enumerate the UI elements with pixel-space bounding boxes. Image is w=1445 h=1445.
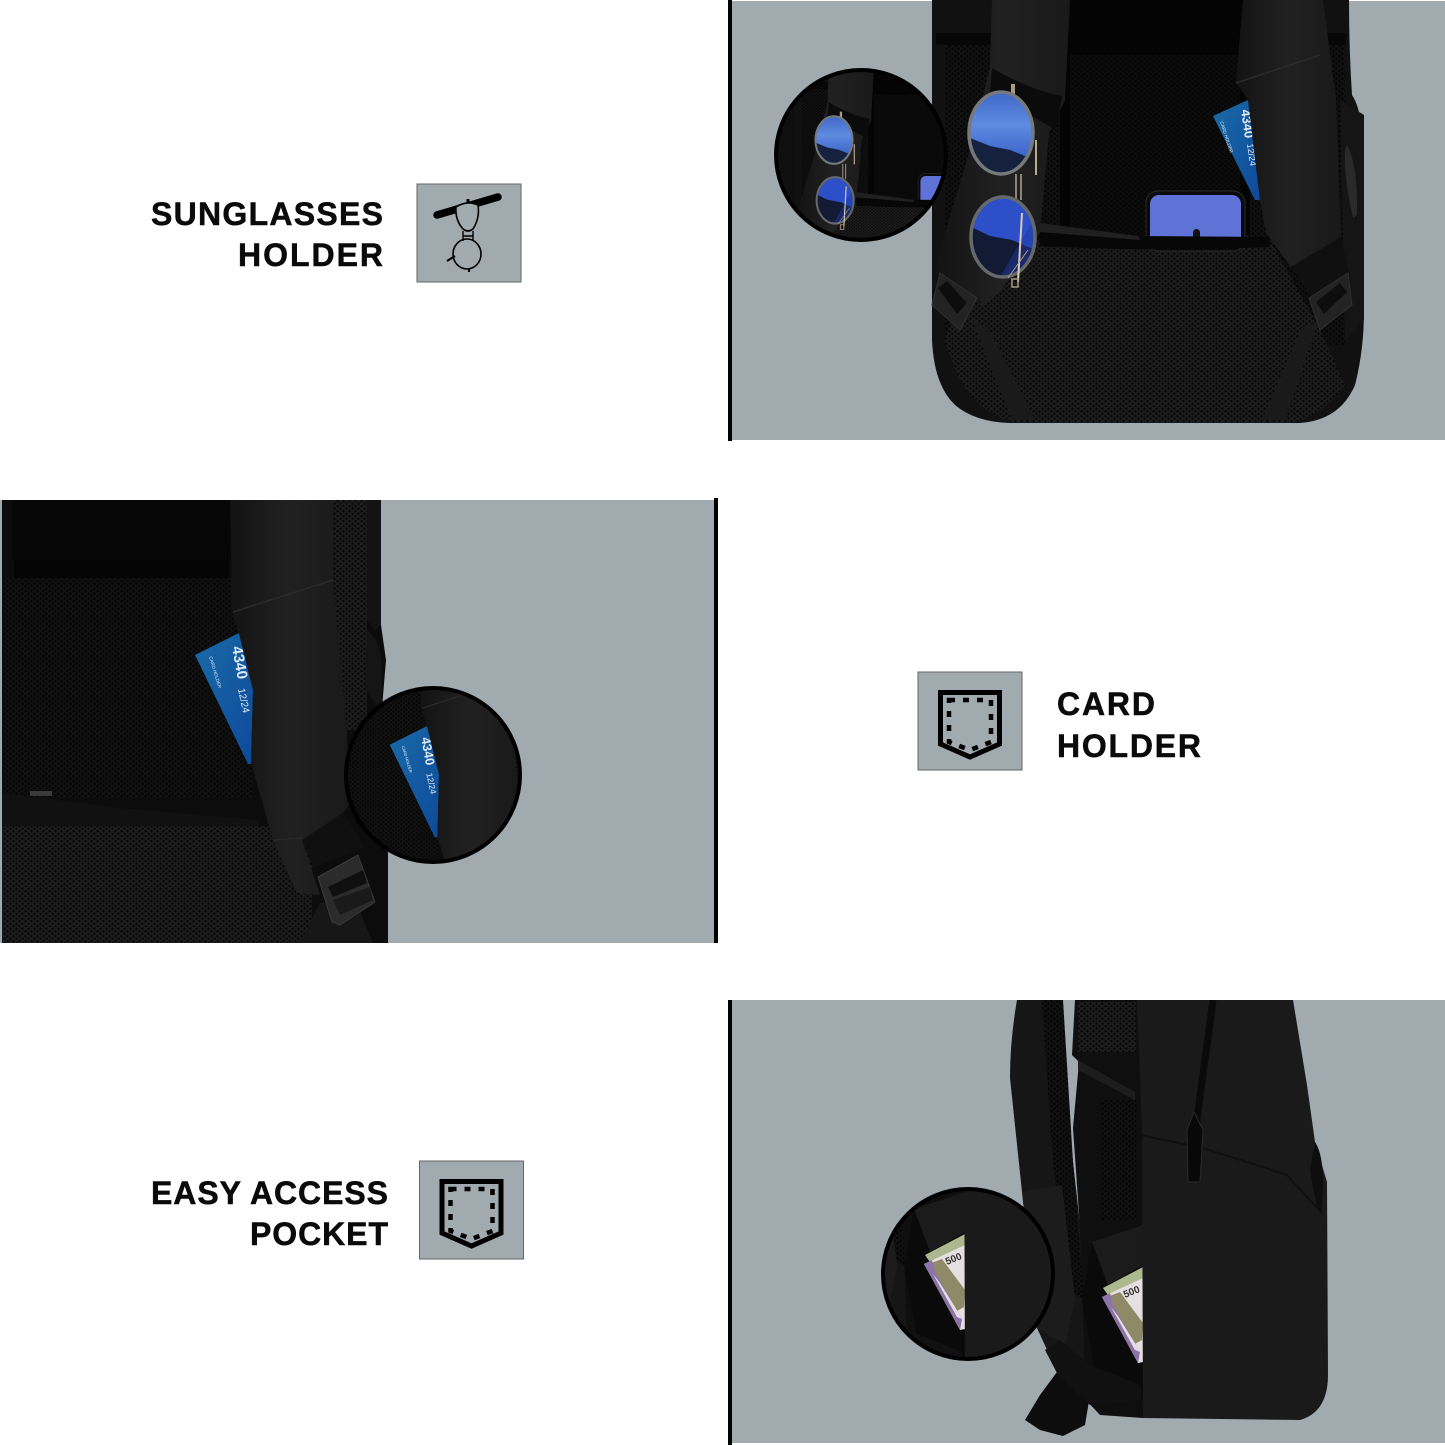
sunglasses holder label: SUNGLASSES [151,196,383,232]
credit card [195,633,253,764]
pocket interior [904,1266,1082,1301]
credit card: 4340 [1238,108,1257,139]
icon: easy access pocket [420,1161,524,1259]
credit card: 12/24 [235,687,251,715]
card holder label: HOLDER [1057,728,1201,764]
magnifier circle: money pocket [881,1187,1055,1361]
panel: sunglasses holder photo [728,0,1445,441]
sunglasses holder label [151,196,383,273]
icon: card holder pocket [918,672,1022,770]
credit card: CARD HOLDER [208,656,223,689]
magnifier circle: sunglasses [774,68,948,242]
easy access pocket label: EASY ACCESS [151,1175,388,1211]
sunglasses holder label: HOLDER [238,237,383,273]
credit card: CARD HOLDER [1219,121,1234,154]
easy access pocket label [151,1175,388,1252]
magnifier circle: card [344,686,522,864]
right shoulder strap [1236,0,1341,267]
back panel [1072,1000,1150,1418]
banknotes [1102,1267,1143,1363]
webbing under strap [302,834,312,864]
credit card: 4340 [228,645,251,681]
shoulder strap [230,500,349,895]
icon: sunglasses on strap [417,184,521,282]
credit card: 12/24 [1245,143,1258,167]
sunglasses [960,84,1040,287]
panel: easy access pocket photo [728,967,1445,1445]
card holder label: CARD [1057,686,1155,722]
panel: card holder photo [0,498,718,990]
zipper [1187,1000,1213,1182]
easy access pocket label: POCKET [250,1216,388,1252]
side release buckle [1025,1372,1090,1436]
front panel [1137,1000,1328,1420]
card holder label [1057,686,1201,764]
left shoulder strap [936,0,1070,307]
buckles [932,273,1352,330]
credit card [1213,100,1260,200]
lower webbing straps and buckles [972,320,1318,420]
buckle [318,855,375,925]
banknotes: 500 [1122,1284,1142,1301]
phone in pocket [1146,191,1245,251]
shoulder strap side view [1010,1000,1085,1361]
